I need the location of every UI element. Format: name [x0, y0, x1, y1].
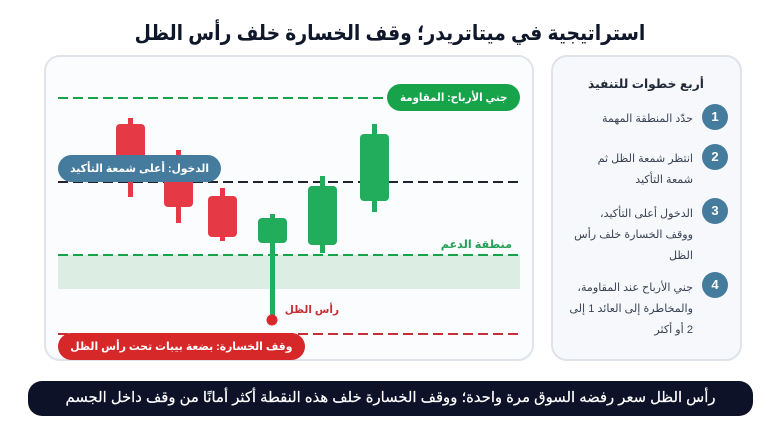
- step 3 number: 3: [711, 203, 719, 218]
- take profit line: [58, 97, 388, 99]
- label: stop loss: وقف الخسارة: بضعة بيبات تحت رأس الظل: [70, 341, 293, 353]
- step 4 number: 4: [711, 277, 719, 292]
- label: take profit: [387, 84, 520, 111]
- step 4 text: والمخاطرة إلى العائد 1 إلى: [569, 303, 693, 315]
- stop loss line: [58, 333, 520, 335]
- step 2 text: انتظر شمعة الظل ثم: [598, 153, 693, 165]
- step 1 number: 1: [711, 109, 719, 124]
- steps heading: أربع خطوات للتنفيذ: [588, 77, 704, 91]
- step 4 number: [702, 272, 728, 298]
- step 4 text: 2 أو أكثر: [654, 324, 693, 336]
- step 2 text: شمعة التأكيد: [635, 174, 693, 186]
- step 3 text: الظل: [669, 250, 693, 262]
- shadow tip marker: [266, 314, 278, 326]
- panel: steps: [551, 55, 742, 361]
- red candle 2: [164, 150, 193, 223]
- step 1 text: حدّد المنطقة المهمة: [602, 113, 693, 125]
- label: support zone: منطقة الدعم: [441, 239, 512, 251]
- step 3 number: [702, 198, 728, 224]
- step 3 text: ووقف الخسارة خلف رأس: [574, 229, 693, 241]
- step 2 number: [702, 144, 728, 170]
- step 2 text: [598, 153, 693, 186]
- title: استراتيجية في ميتاتريدر؛ وقف الخسارة خلف رأس الظل: [135, 22, 645, 45]
- entry line: [58, 181, 520, 183]
- label: take profit: جني الأرباح: المقاومة: [400, 92, 507, 104]
- label: stop loss: [58, 333, 305, 360]
- panel: chart: [44, 55, 534, 361]
- red candle 3: [208, 188, 237, 241]
- step 4 text: [569, 280, 693, 336]
- step 3 text: الدخول أعلى التأكيد،: [600, 208, 693, 220]
- support zone band: [58, 255, 520, 289]
- label: shadow tip: رأس الظل: [285, 304, 339, 316]
- green shadow candle with long lower wick: [258, 214, 287, 320]
- step 3 text: [574, 206, 693, 262]
- label: entry: [58, 155, 221, 182]
- green candle 6: [360, 124, 389, 212]
- support line: [58, 254, 520, 256]
- label: entry: الدخول: أعلى شمعة التأكيد: [70, 163, 209, 175]
- footer callout: رأس الظل سعر رفضه السوق مرة واحدة؛ ووقف الخسارة خلف هذه النقطة أكثر أمانًا من وقف داخل الجسم: [65, 390, 716, 406]
- step 4 text: جني الأرباح عند المقاومة،: [577, 282, 693, 294]
- footer callout: [28, 381, 753, 416]
- step 1 number: [702, 104, 728, 130]
- green candle 5: [308, 176, 337, 253]
- red candle 1: [116, 118, 145, 197]
- step 2 number: 2: [711, 149, 719, 164]
